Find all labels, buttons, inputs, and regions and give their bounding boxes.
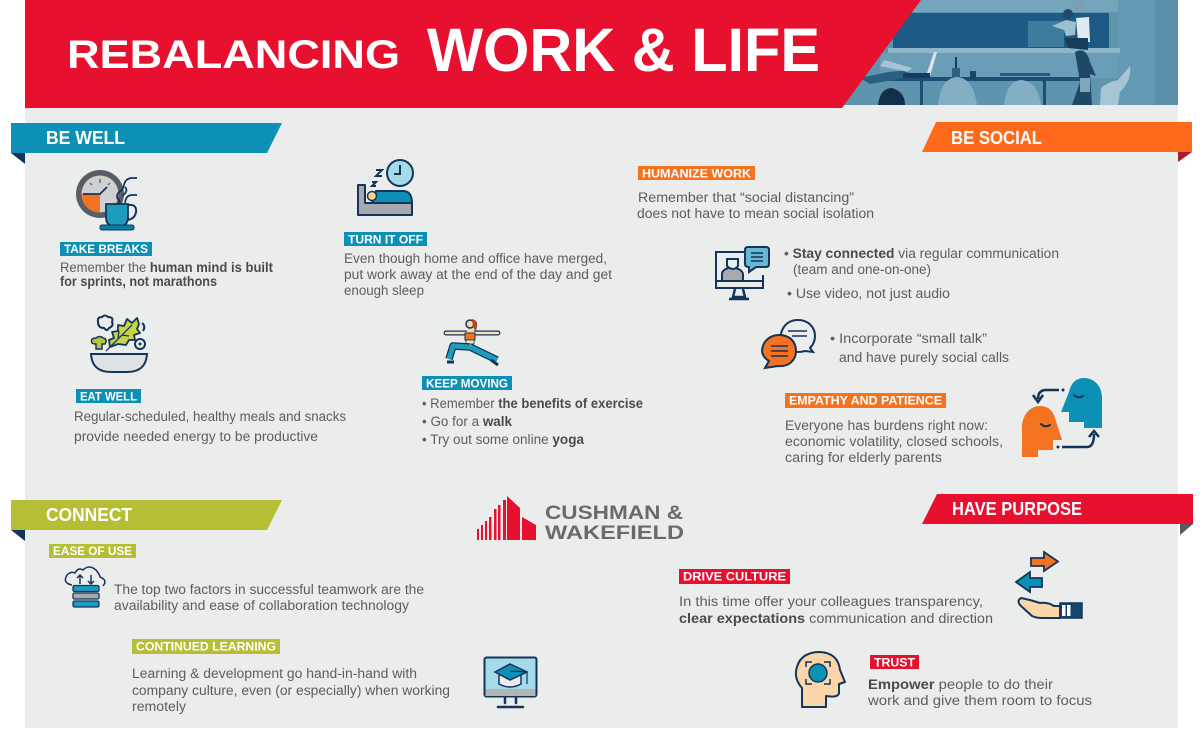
ribbon: have purpose: HAVE PURPOSE [952, 499, 1082, 519]
text block: eat well: Regular-scheduled, healthy meals and snacks [74, 409, 346, 424]
text block: continued learning [132, 639, 450, 714]
text block: small talk: • Incorporate “small talk” [830, 331, 987, 346]
text block: trust: TRUST [874, 656, 916, 670]
icon: salad bowl [91, 316, 147, 372]
icon: clock and coffee cup [76, 170, 137, 230]
text block: empathy and patience: Everyone has burdens right now: [785, 418, 988, 433]
icon: yoga pose [446, 319, 498, 365]
text block: trust: Empower people to do their [868, 677, 1054, 692]
text block: humanize work: does not have to mean social isolation [637, 206, 874, 221]
ribbon: be social: BE SOCIAL [951, 128, 1042, 148]
text block: continued learning: company culture, even (or especially) when working [132, 683, 450, 698]
text block: drive culture: DRIVE CULTURE [683, 570, 786, 584]
icon: video call monitor [716, 247, 769, 299]
section: have purpose [679, 494, 1193, 708]
text block: trust [867, 655, 1092, 708]
text block: empathy and patience [785, 393, 1003, 465]
icon: head with target [796, 652, 845, 707]
text block: humanize work: Remember that “social distancing” [638, 190, 854, 205]
icon: arrows and open hand [1016, 552, 1082, 618]
text block: turn it off [344, 232, 612, 298]
text block: teamwork factors: availability and ease of collaboration technology [114, 598, 409, 613]
label: ease of use: EASE OF USE [53, 544, 132, 558]
text block: empathy and patience: caring for elderly parents [785, 450, 942, 465]
text block: drive culture: clear expectations communication and direction [679, 611, 993, 626]
text block: humanize work [637, 166, 874, 221]
icon: bed and clock [358, 160, 413, 215]
text block: eat well: EAT WELL [80, 390, 137, 404]
icon: cloud server [65, 567, 105, 607]
text block: drive culture [679, 569, 993, 626]
ribbon: connect: CONNECT [46, 505, 132, 525]
text block: take breaks: Remember the human mind is built [60, 260, 273, 275]
text block: take breaks: TAKE BREAKS [64, 242, 148, 256]
text block: continued learning: remotely [132, 699, 186, 714]
text block: keep moving: • Try out some online yoga [422, 432, 584, 447]
text block: continued learning: Learning & development go hand-in-hand with [132, 666, 417, 681]
title: work and life: WORK & LIFE [427, 16, 820, 84]
text block: turn it off: put work away at the end of the day and get [344, 267, 612, 282]
logo: cushman and wakefield: WAKEFIELD [545, 523, 684, 544]
ribbon: connect [11, 500, 282, 541]
icon: chat bubbles [762, 320, 815, 368]
logo: cushman and wakefield: CUSHMAN & [545, 503, 683, 524]
text block: teamwork factors [114, 582, 424, 613]
text block: take breaks: for sprints, not marathons [60, 274, 217, 289]
logo: cushman and wakefield [477, 496, 684, 544]
text block: stay connected: (team and one-on-one) [793, 262, 931, 277]
text block: empathy and patience: economic volatility, closed schools, [785, 434, 1003, 449]
section: connect [11, 500, 536, 714]
icon: graduation monitor [484, 658, 536, 707]
title: rebalancing: REBALANCING [67, 33, 400, 77]
ribbon: have purpose [922, 494, 1193, 535]
text block: empathy and patience: EMPATHY AND PATIENCE [789, 394, 942, 408]
section: be social [637, 122, 1192, 465]
text block: keep moving: • Go for a walk [422, 414, 512, 429]
text block: turn it off: Even though home and office have merged, [344, 251, 607, 266]
text block: keep moving [422, 376, 643, 447]
ribbon: be well [11, 123, 282, 164]
text block: continued learning: CONTINUED LEARNING [136, 640, 276, 654]
text block: humanize work: HUMANIZE WORK [642, 166, 751, 180]
icon: two heads exchanging [1022, 378, 1102, 457]
text block: trust: work and give them room to focus [867, 693, 1092, 708]
text block: stay connected: • Use video, not just audio [787, 286, 950, 301]
title banner [25, 0, 921, 108]
text block: stay connected: • Stay connected via regular communication [784, 246, 1059, 261]
ribbon: be social [922, 122, 1192, 162]
text block: take breaks [60, 242, 273, 289]
text block: drive culture: In this time offer your colleagues transparency, [679, 594, 983, 609]
photo: family at kitchen table [842, 0, 1178, 105]
text block: small talk [830, 331, 1009, 365]
text block: keep moving: KEEP MOVING [426, 376, 508, 390]
text block: stay connected [784, 246, 1059, 301]
ribbon: be well: BE WELL [46, 128, 125, 148]
text block: small talk: and have purely social calls [839, 350, 1009, 365]
text block: turn it off: enough sleep [344, 283, 424, 298]
text block: teamwork factors: The top two factors in successful teamwork are the [114, 582, 424, 597]
text block: turn it off: TURN IT OFF [348, 232, 423, 246]
text block: eat well [74, 389, 346, 444]
text block: eat well: provide needed energy to be productive [74, 429, 318, 444]
text block: keep moving: • Remember the benefits of exercise [422, 396, 643, 411]
section: be well [11, 123, 643, 447]
